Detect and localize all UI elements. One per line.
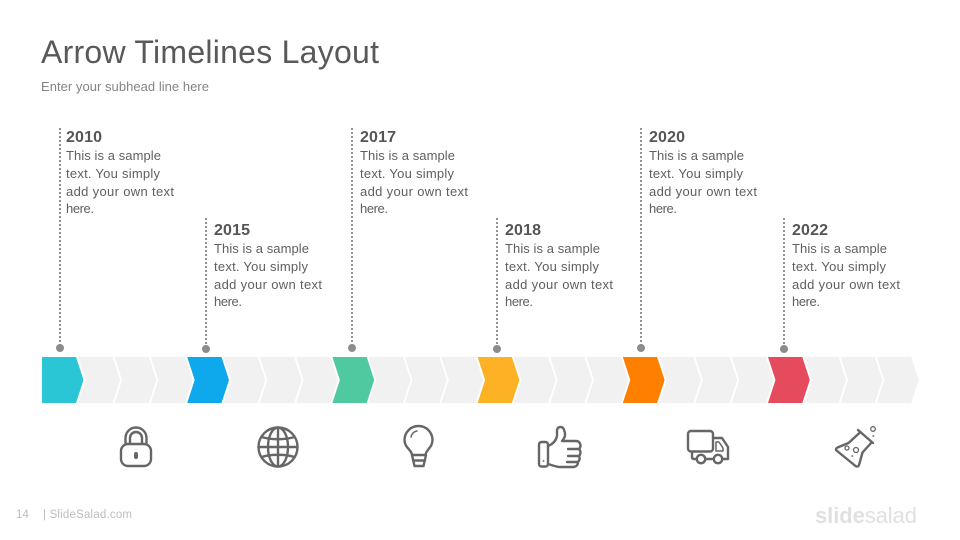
milestone 2017 [348,128,468,352]
milestone 2015: 2015 [214,222,250,239]
icon: padlock [121,428,151,466]
milestone 2020: here. [649,201,677,216]
milestone 2017: This is a sample [360,148,455,163]
milestone 2010: text. You simply [66,166,160,181]
milestone 2022: text. You simply [792,259,886,274]
milestone 2020: add your own text [649,184,757,199]
milestone 2010: 2010 [66,129,102,146]
milestone 2015: add your own text [214,277,322,292]
milestone 2010 [56,128,174,352]
milestone 2017: here. [360,201,388,216]
milestone 2018: add your own text [505,277,613,292]
milestone 2010: add your own text [66,184,174,199]
brand logo: slidesalad [815,503,917,528]
milestone 2015 [202,218,322,353]
milestone 2010: This is a sample [66,148,161,163]
icon: thumbs up [539,427,580,467]
milestone 2020: text. You simply [649,166,744,181]
milestone 2017: 2017 [360,129,396,146]
arrow timeline band [42,357,919,403]
milestone 2018: 2018 [505,222,541,239]
icon: chemistry flask [836,427,875,467]
milestone 2018: This is a sample [505,241,600,256]
milestone 2018: here. [505,294,533,309]
icon: globe [258,428,298,466]
milestone 2017: text. You simply [360,166,454,181]
milestone 2020: This is a sample [649,148,744,163]
milestone 2020 [637,128,757,352]
milestone 2022: 2022 [792,222,828,239]
milestone 2018 [493,218,613,353]
milestone 2015: here. [214,294,242,309]
milestone 2018: text. You simply [505,259,600,274]
milestone 2015: text. You simply [214,259,308,274]
subhead: Enter your subhead line here [41,79,209,94]
milestone 2022: This is a sample [792,241,887,256]
icon: delivery truck [688,431,728,463]
icon: light bulb [404,426,433,466]
milestone 2022: here. [792,294,820,309]
page number: 14 [16,509,29,521]
title: Arrow Timelines Layout [41,34,379,70]
milestone 2015: This is a sample [214,241,309,256]
footer source: | SlideSalad.com [43,509,132,521]
milestone 2020: 2020 [649,129,685,146]
milestone 2022: add your own text [792,277,900,292]
milestone 2010: here. [66,201,94,216]
milestone 2022 [780,218,900,353]
milestone 2017: add your own text [360,184,468,199]
